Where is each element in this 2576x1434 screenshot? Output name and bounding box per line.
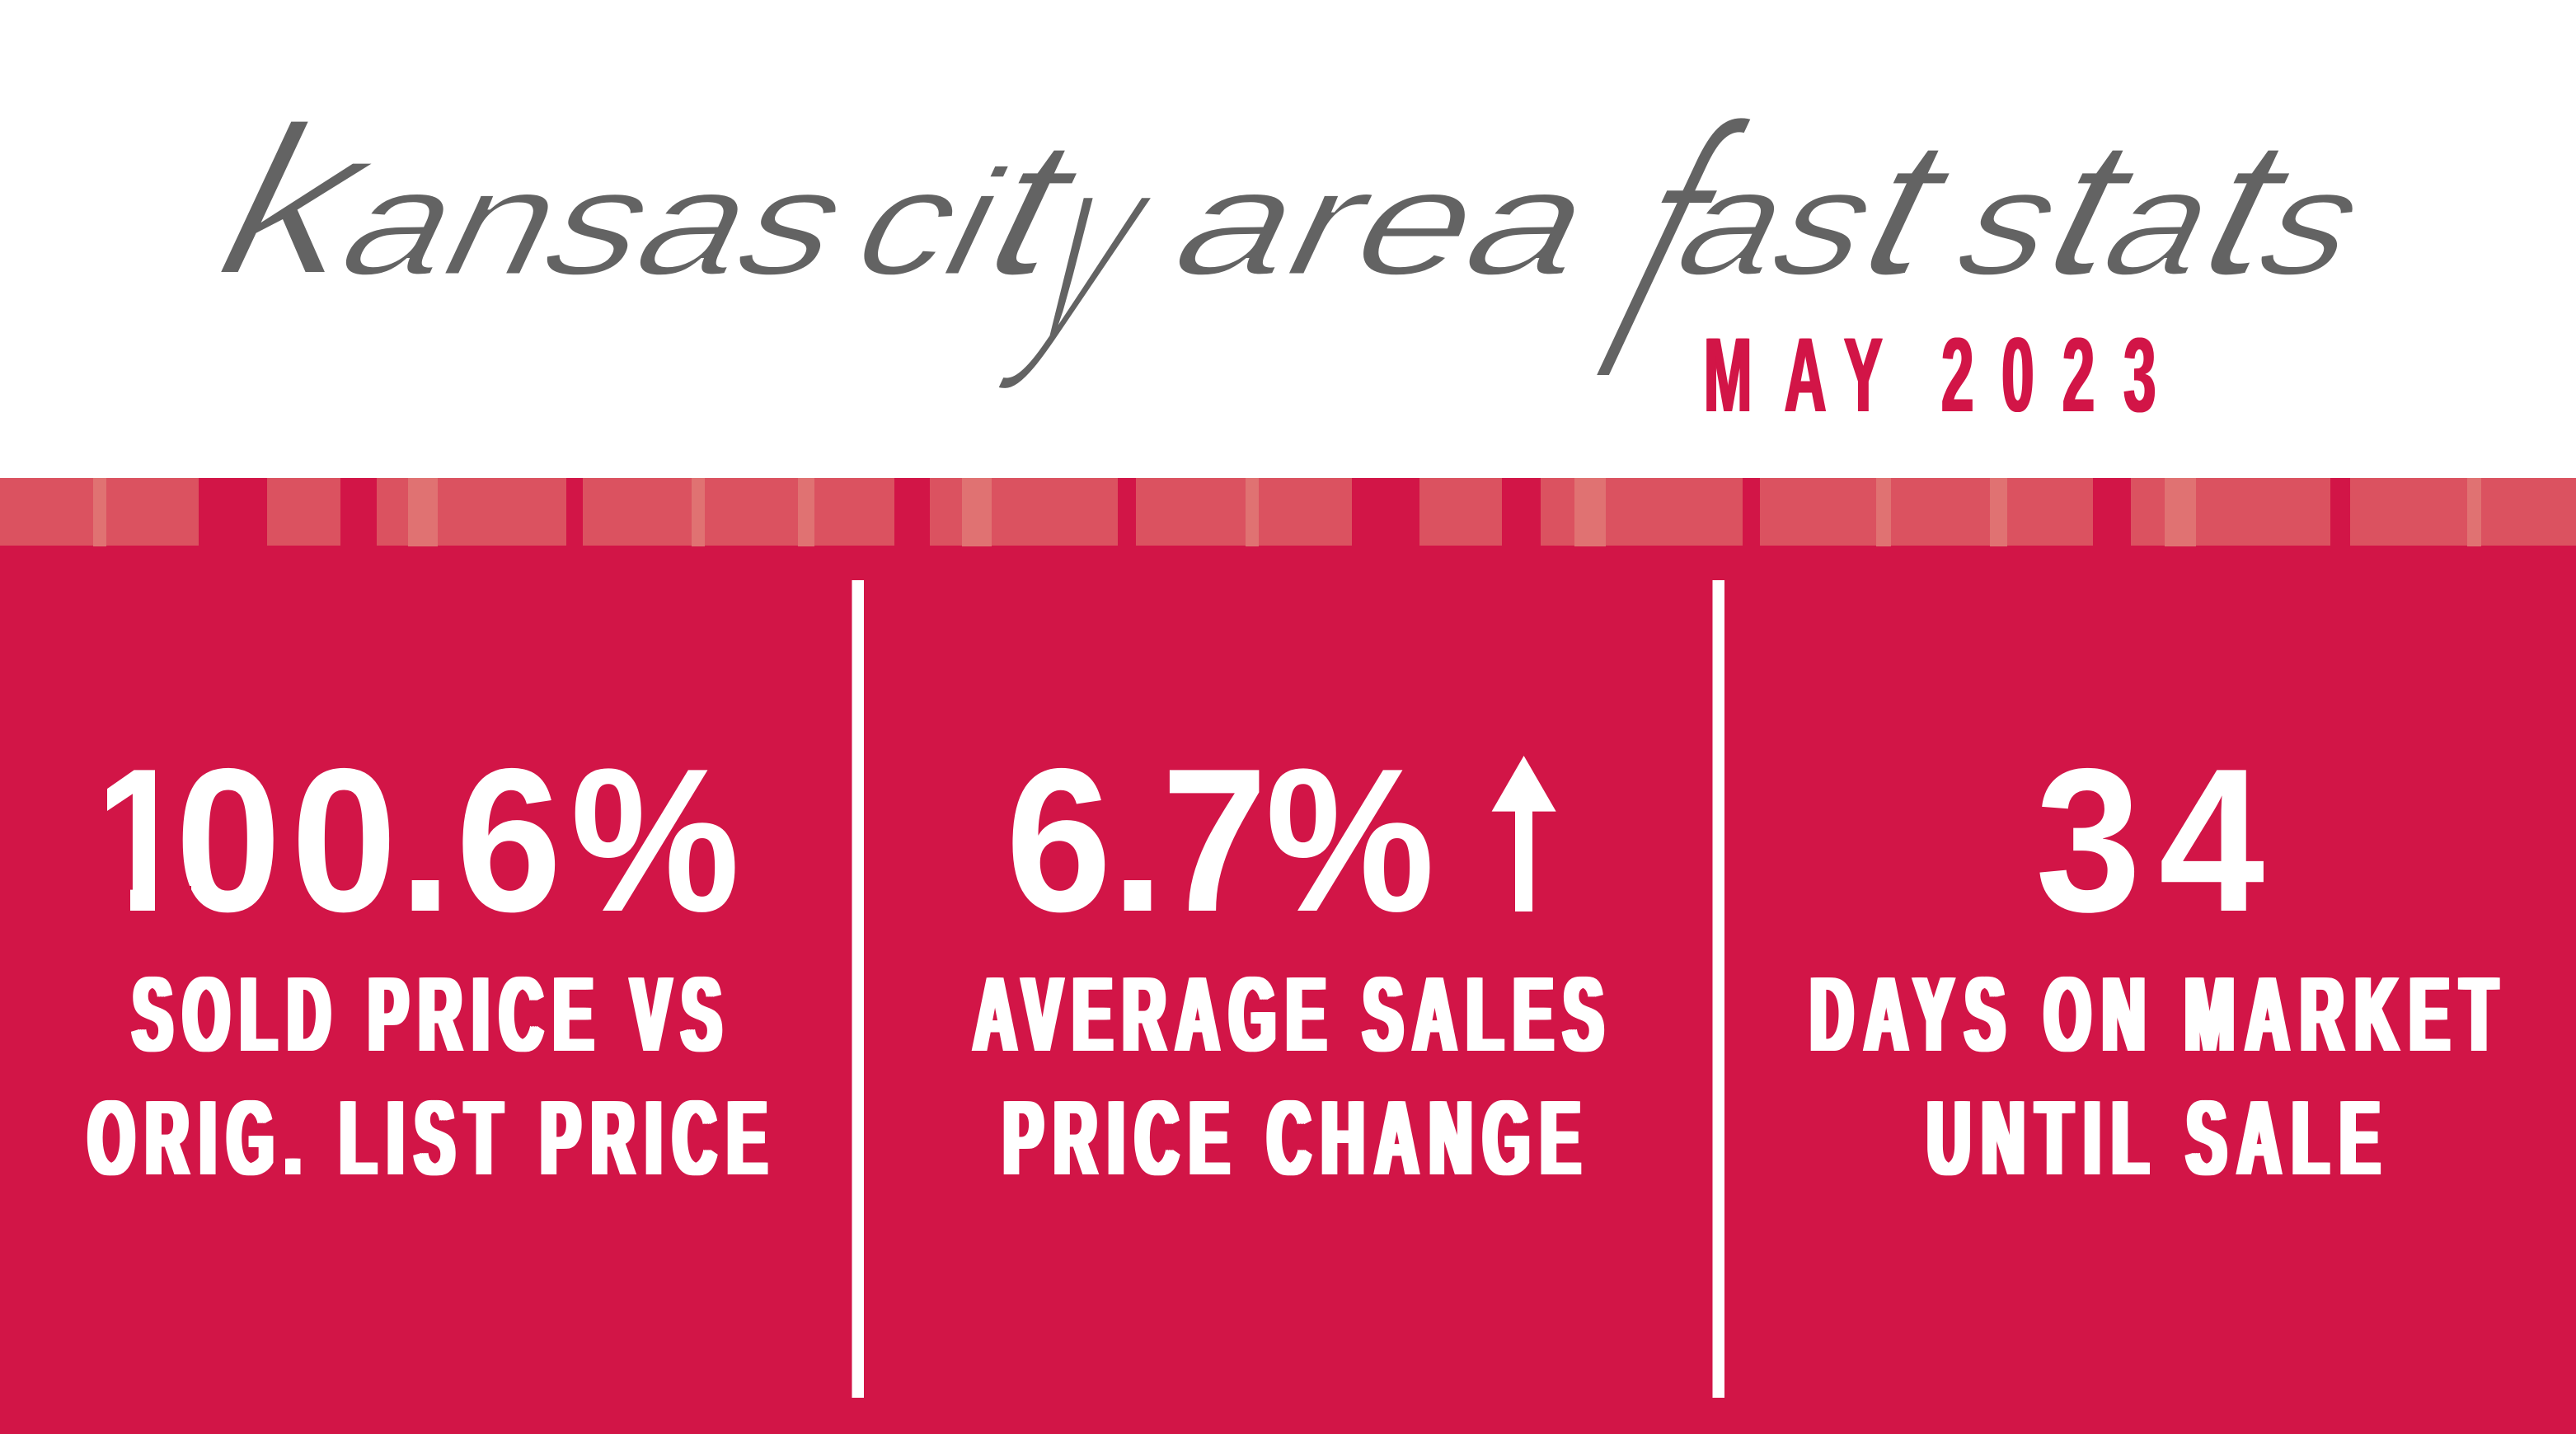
stat label — [1810, 955, 2497, 1197]
stat value: 6.7% — [1006, 726, 1435, 954]
divider: second — [1713, 580, 1724, 1398]
subtitle: month: MAY 2023 — [1704, 316, 2156, 433]
stat label: PRICE CHANGE — [1003, 1079, 1580, 1197]
stat: days on market — [1810, 725, 2497, 1197]
stat label — [974, 955, 1603, 1197]
title: f — [1535, 46, 1788, 460]
stat: average sales price change — [974, 726, 1603, 1197]
stat label: ORIG. LIST PRICE — [88, 1079, 767, 1197]
title: y — [988, 92, 1204, 396]
striped band — [0, 478, 2576, 546]
stat label: UNTIL SALE — [1927, 1079, 2380, 1197]
title: area — [1147, 139, 1627, 307]
divider: first — [852, 580, 864, 1398]
title: stats — [1926, 99, 2414, 316]
title: kansas — [178, 80, 907, 320]
stat value: 34 — [2035, 725, 2264, 954]
stat label: SOLD PRICE VS — [133, 955, 721, 1074]
stat label — [88, 955, 767, 1197]
stat label: DAYS ON MARKET — [1810, 955, 2497, 1074]
stat label: AVERAGE SALES — [974, 955, 1603, 1074]
crimson panel — [0, 478, 2576, 1434]
title: cit — [823, 99, 1117, 316]
stat: sold price vs list price — [87, 768, 768, 1175]
icon: up arrow — [1492, 756, 1556, 911]
stat value: 100.6% — [88, 726, 740, 954]
title: ast — [1646, 99, 1990, 316]
title — [178, 46, 2414, 460]
